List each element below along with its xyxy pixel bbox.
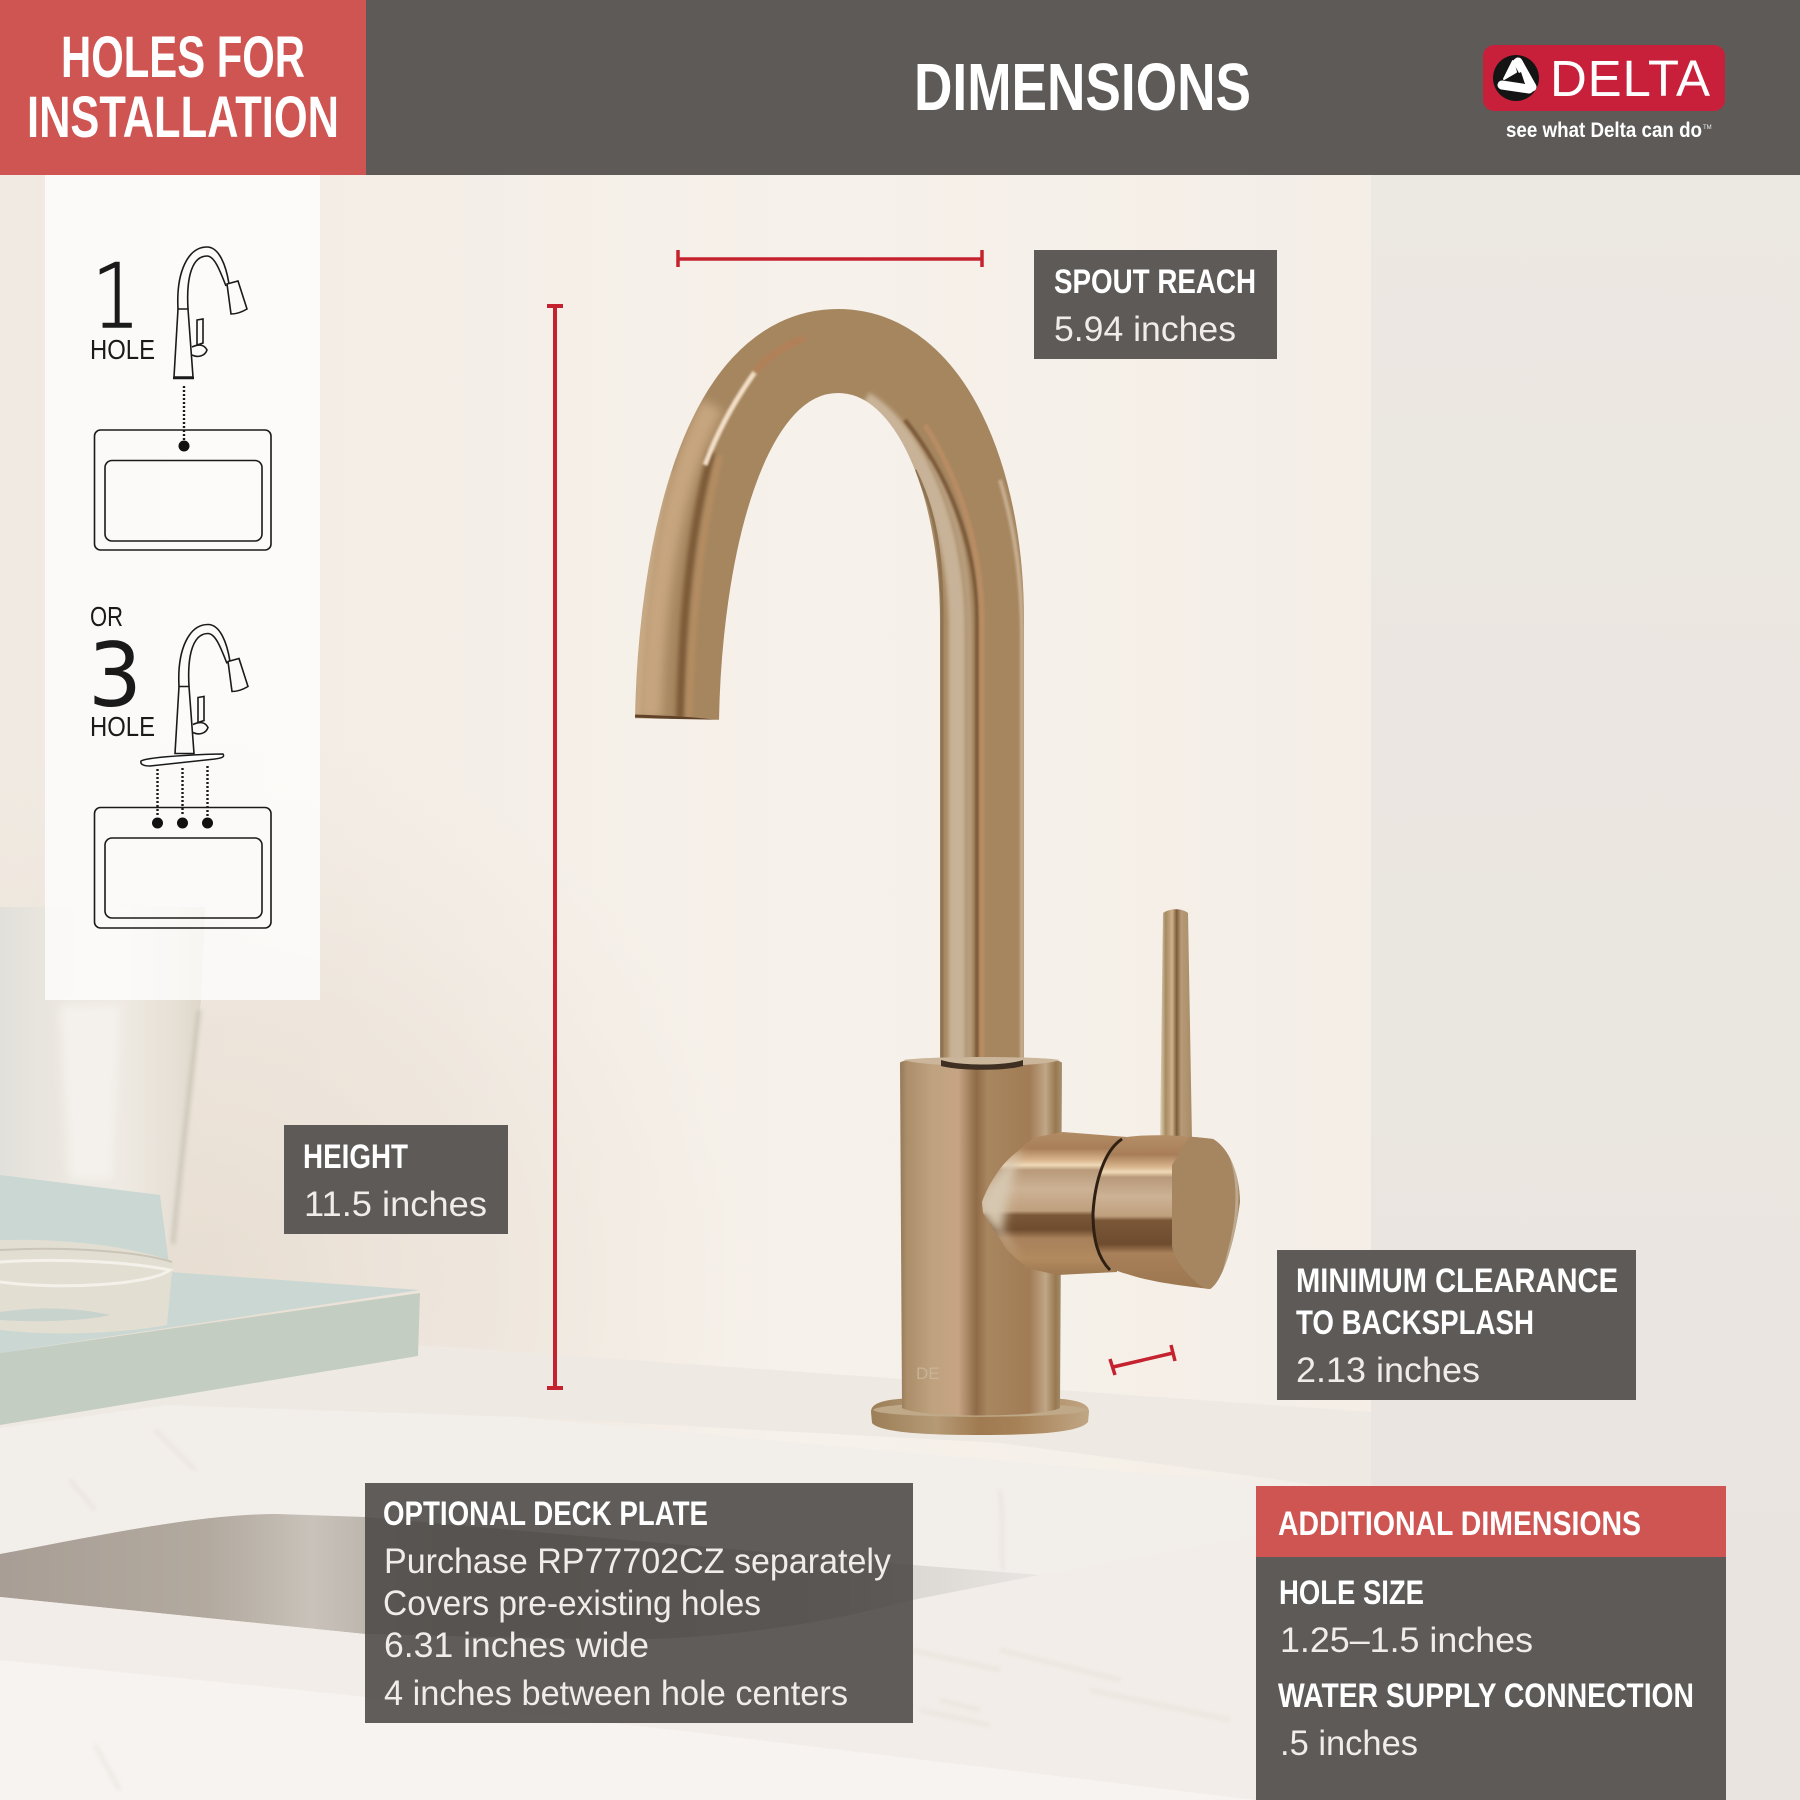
dimension line: spout reach [678,250,982,267]
icon: pull-down faucet on deck plate [175,624,248,754]
counter top surface [0,1345,1371,1492]
dimension line: height [547,305,563,1389]
wall: right section [1371,0,1800,1800]
dimension line: backsplash clearance [1110,1345,1175,1375]
callout: optional deck plate: Purchase RP77702CZ separately [384,1542,891,1581]
label hole: HOLE [90,711,155,742]
deck base plate [871,1397,1089,1435]
logo badge [1483,45,1725,111]
callout: spout reach: 5.94 inches [1054,310,1236,349]
dotted connectors [158,766,208,816]
callout: spout reach: SPOUT REACH [1054,263,1256,301]
deck plate [141,754,224,766]
callout: optional deck plate: 6.31 inches wide [384,1626,649,1665]
callout: minimum clearance: 2.13 inches [1296,1351,1480,1390]
callout: optional deck plate: 4 inches between hole centers [384,1674,848,1713]
spec: water supply connection: WATER SUPPLY CONNECTION [1278,1677,1694,1715]
faucet spout [635,309,1024,1058]
numeral 1: 1 [92,245,140,348]
spec: hole size: HOLE SIZE [1279,1574,1424,1612]
counter front face [0,1405,1371,1800]
panel body [1256,1557,1726,1800]
callout: height: 11.5 inches [304,1185,487,1224]
heading: additional dimensions: ADDITIONAL DIMENSIONS [1278,1505,1641,1543]
header bar [0,0,1800,175]
spec: hole size [1279,1574,1533,1660]
callout: minimum clearance: TO BACKSPLASH [1296,1304,1534,1342]
tagline: see what Delta can do [1506,119,1702,142]
spec: hole size: 1.25–1.5 inches [1280,1621,1533,1660]
callout: minimum clearance: MINIMUM CLEARANCE [1296,1262,1618,1300]
heading: holes for installation: HOLES FOR [61,25,305,90]
callout: minimum clearance [1277,1250,1636,1400]
callout: optional deck plate: OPTIONAL DECK PLATE [383,1495,708,1533]
blue tray top [0,1175,420,1353]
panel header [1256,1486,1726,1557]
wall shading [0,700,780,1500]
spec: water supply connection [1278,1677,1694,1763]
logo mark [1493,55,1539,101]
one hole option [90,245,271,550]
panel: additional dimensions [1256,1486,1726,1800]
three hole option [88,601,271,928]
label or: OR [90,601,123,632]
callout: optional deck plate [365,1483,913,1723]
spout collar [941,1060,1023,1070]
dotted connector [183,386,185,440]
trademark: TM [1703,125,1712,131]
drinking glass upper [0,907,205,1244]
callout: height [284,1125,508,1234]
delta logo [1483,45,1725,142]
heading: holes for installation: INSTALLATION [27,85,339,150]
icon: pull-down faucet [173,247,247,378]
spec: water supply connection: .5 inches [1280,1724,1418,1763]
body cylinder [900,1057,1062,1416]
blue tray front [0,1293,420,1425]
handle knob [1094,1135,1240,1289]
wall: left section [0,0,1372,1500]
header grey band [0,0,1800,175]
handle groove [1093,1139,1122,1270]
engraved logo: DE [916,1364,940,1383]
drinking glass base [0,1010,199,1333]
sink with three holes [94,808,271,928]
callout: optional deck plate: Covers pre-existing holes [383,1584,761,1623]
sink basin [0,1514,1040,1640]
callout: spout reach [1034,250,1277,359]
header red tab [0,0,366,175]
marble veins [70,1430,1230,1790]
faucet photo [620,300,1250,1435]
panel background [45,175,320,1000]
numeral 3: 3 [88,624,142,727]
handle barrel [982,1132,1127,1275]
faucet body [871,1057,1089,1435]
handle lever [1160,909,1192,1144]
label hole: HOLE [90,334,155,365]
sink with one hole [94,430,271,550]
logo wordmark: DELTA [1550,50,1710,107]
panel: holes for installation [45,175,320,1000]
lower marble front edge [0,1660,1256,1800]
callout: height: HEIGHT [303,1138,408,1176]
heading: holes for installation [27,25,339,150]
lower marble surface [0,1510,1371,1800]
heading: dimensions: DIMENSIONS [914,50,1251,125]
